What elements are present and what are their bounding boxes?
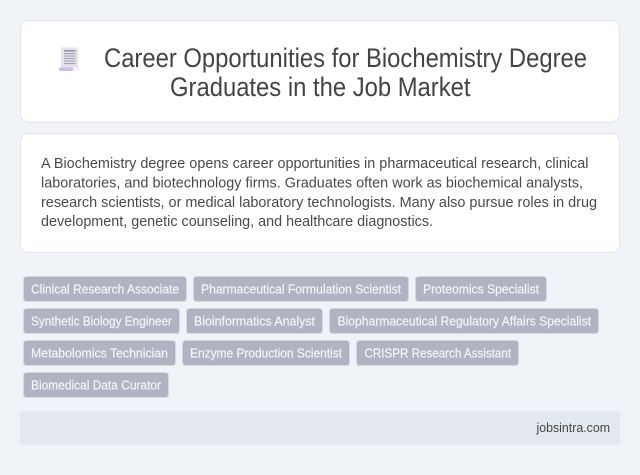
tag: Biomedical Data Curator (24, 372, 168, 398)
tag: Biopharmaceutical Regulatory Affairs Specialist (330, 308, 598, 334)
footer bar: jobsintra.com (536, 420, 610, 435)
text block: description: laboratories, and biotechnology firms. Graduates often work as biochemical analysts, (41, 176, 583, 192)
tag: Metabolomics Technician: Metabolomics Technician (31, 346, 168, 360)
tag: Enzyme Production Scientist (182, 340, 350, 366)
text block: description: A Biochemistry degree opens career opportunities in pharmaceutical research, clinical (41, 156, 588, 172)
tag: CRISPR Research Assistant: CRISPR Research Assistant (364, 346, 511, 360)
panel: career tags (24, 276, 598, 398)
tag: Metabolomics Technician (24, 340, 176, 366)
tag: Bioinformatics Analyst (186, 308, 322, 334)
tag: CRISPR Research Assistant (356, 340, 518, 366)
tag: Biomedical Data Curator: Biomedical Data Curator (31, 378, 161, 392)
tag: Proteomics Specialist (416, 276, 546, 302)
title: Graduates in the Job Market (170, 72, 471, 102)
tag: Enzyme Production Scientist: Enzyme Production Scientist (190, 346, 342, 360)
tag: Synthetic Biology Engineer: Synthetic Biology Engineer (31, 314, 172, 328)
tag: Clinical Research Associate: Clinical Research Associate (31, 282, 179, 296)
text block: description (41, 156, 597, 230)
panel: description card (20, 134, 620, 252)
tag: Synthetic Biology Engineer (24, 308, 180, 334)
panel: header card (20, 20, 620, 122)
tag: Biopharmaceutical Regulatory Affairs Specialist: Biopharmaceutical Regulatory Affairs Specialist (338, 314, 591, 328)
title (104, 43, 587, 102)
tag: Proteomics Specialist: Proteomics Specialist (423, 282, 539, 296)
tag: Pharmaceutical Formulation Scientist: Pharmaceutical Formulation Scientist (201, 282, 401, 296)
title: Career Opportunities for Biochemistry Degree (104, 43, 587, 73)
text block: description: development, genetic counseling, and healthcare diagnostics. (41, 214, 433, 230)
icon: document scroll (59, 48, 78, 71)
footer bar (20, 411, 620, 445)
tag: Pharmaceutical Formulation Scientist (194, 276, 408, 302)
tag: Bioinformatics Analyst: Bioinformatics Analyst (194, 314, 315, 328)
text block: description: research scientists, or medical laboratory technologists. Many also pursue roles in drug (41, 195, 597, 211)
tag: Clinical Research Associate (24, 276, 186, 302)
